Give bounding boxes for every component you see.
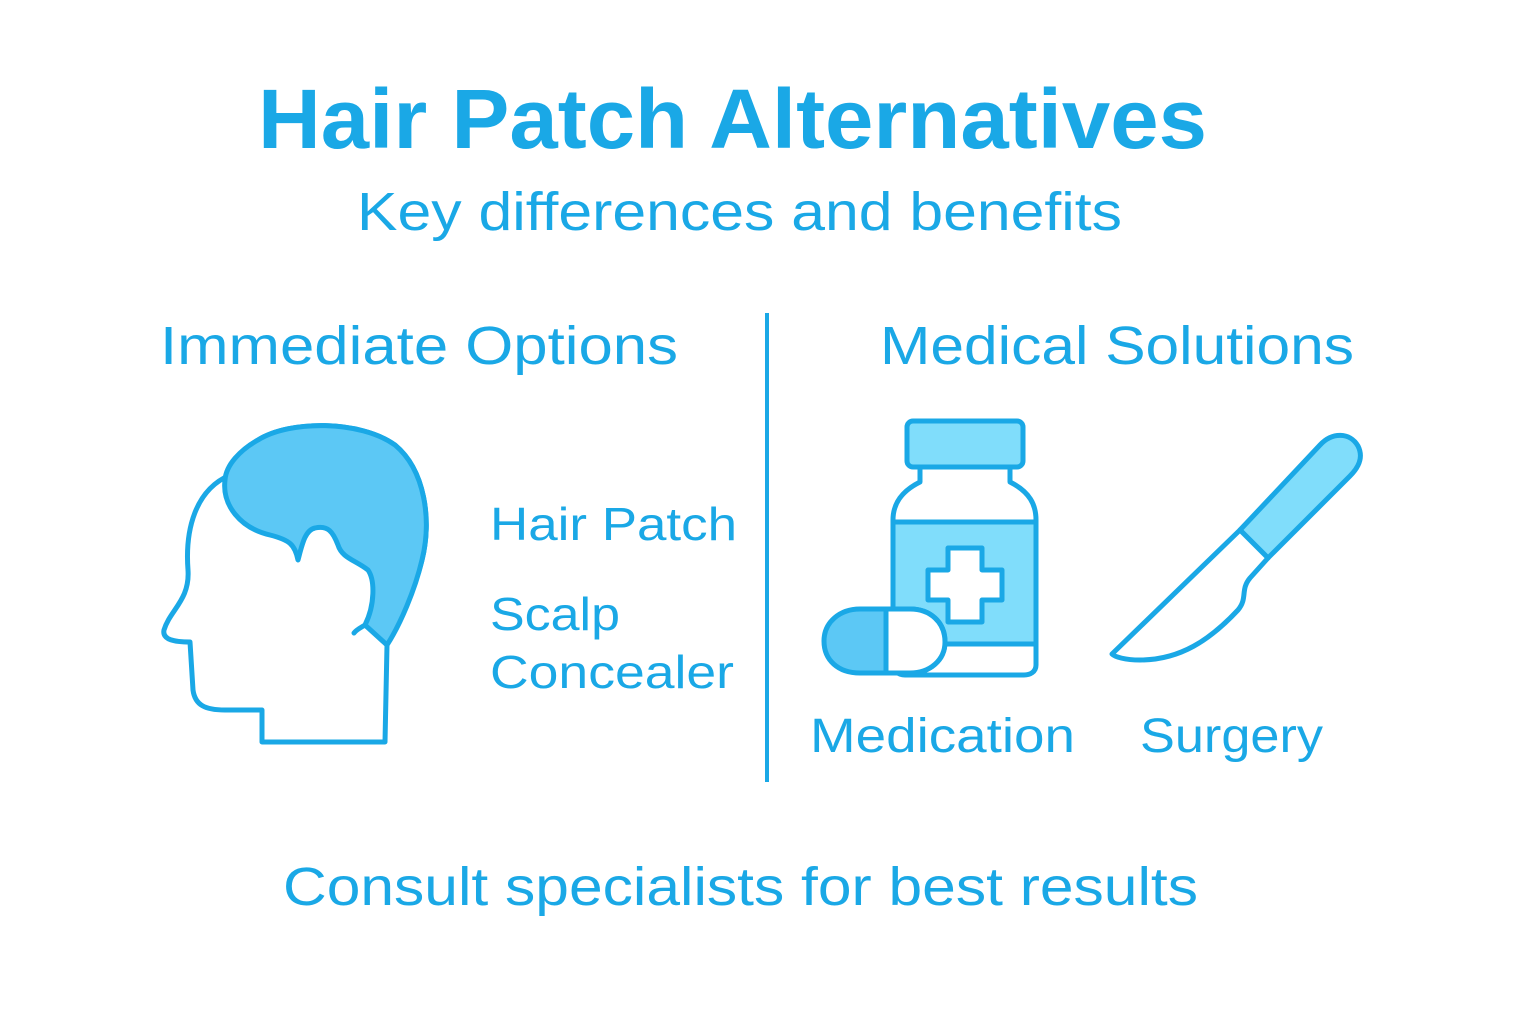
label: surgery: Surgery — [1140, 710, 1323, 763]
text: scalp concealer — [490, 588, 734, 698]
icon: medication bottle and pill — [824, 421, 1036, 675]
text: scalp concealer: Scalp — [490, 588, 620, 640]
footer: Consult specialists for best results — [283, 857, 1198, 917]
heading: medical solutions: Medical Solutions — [880, 316, 1354, 376]
divider — [765, 313, 769, 782]
text: hair patch: Hair Patch — [490, 498, 737, 550]
label: medication: Medication — [810, 710, 1075, 763]
icon: scalpel — [1112, 435, 1360, 660]
text: scalp concealer: Concealer — [490, 646, 734, 698]
heading: immediate options: Immediate Options — [160, 316, 678, 376]
subtitle: Key differences and benefits — [357, 182, 1122, 242]
icon: head with hair patch — [164, 426, 426, 742]
title: Hair Patch Alternatives — [258, 72, 1207, 166]
